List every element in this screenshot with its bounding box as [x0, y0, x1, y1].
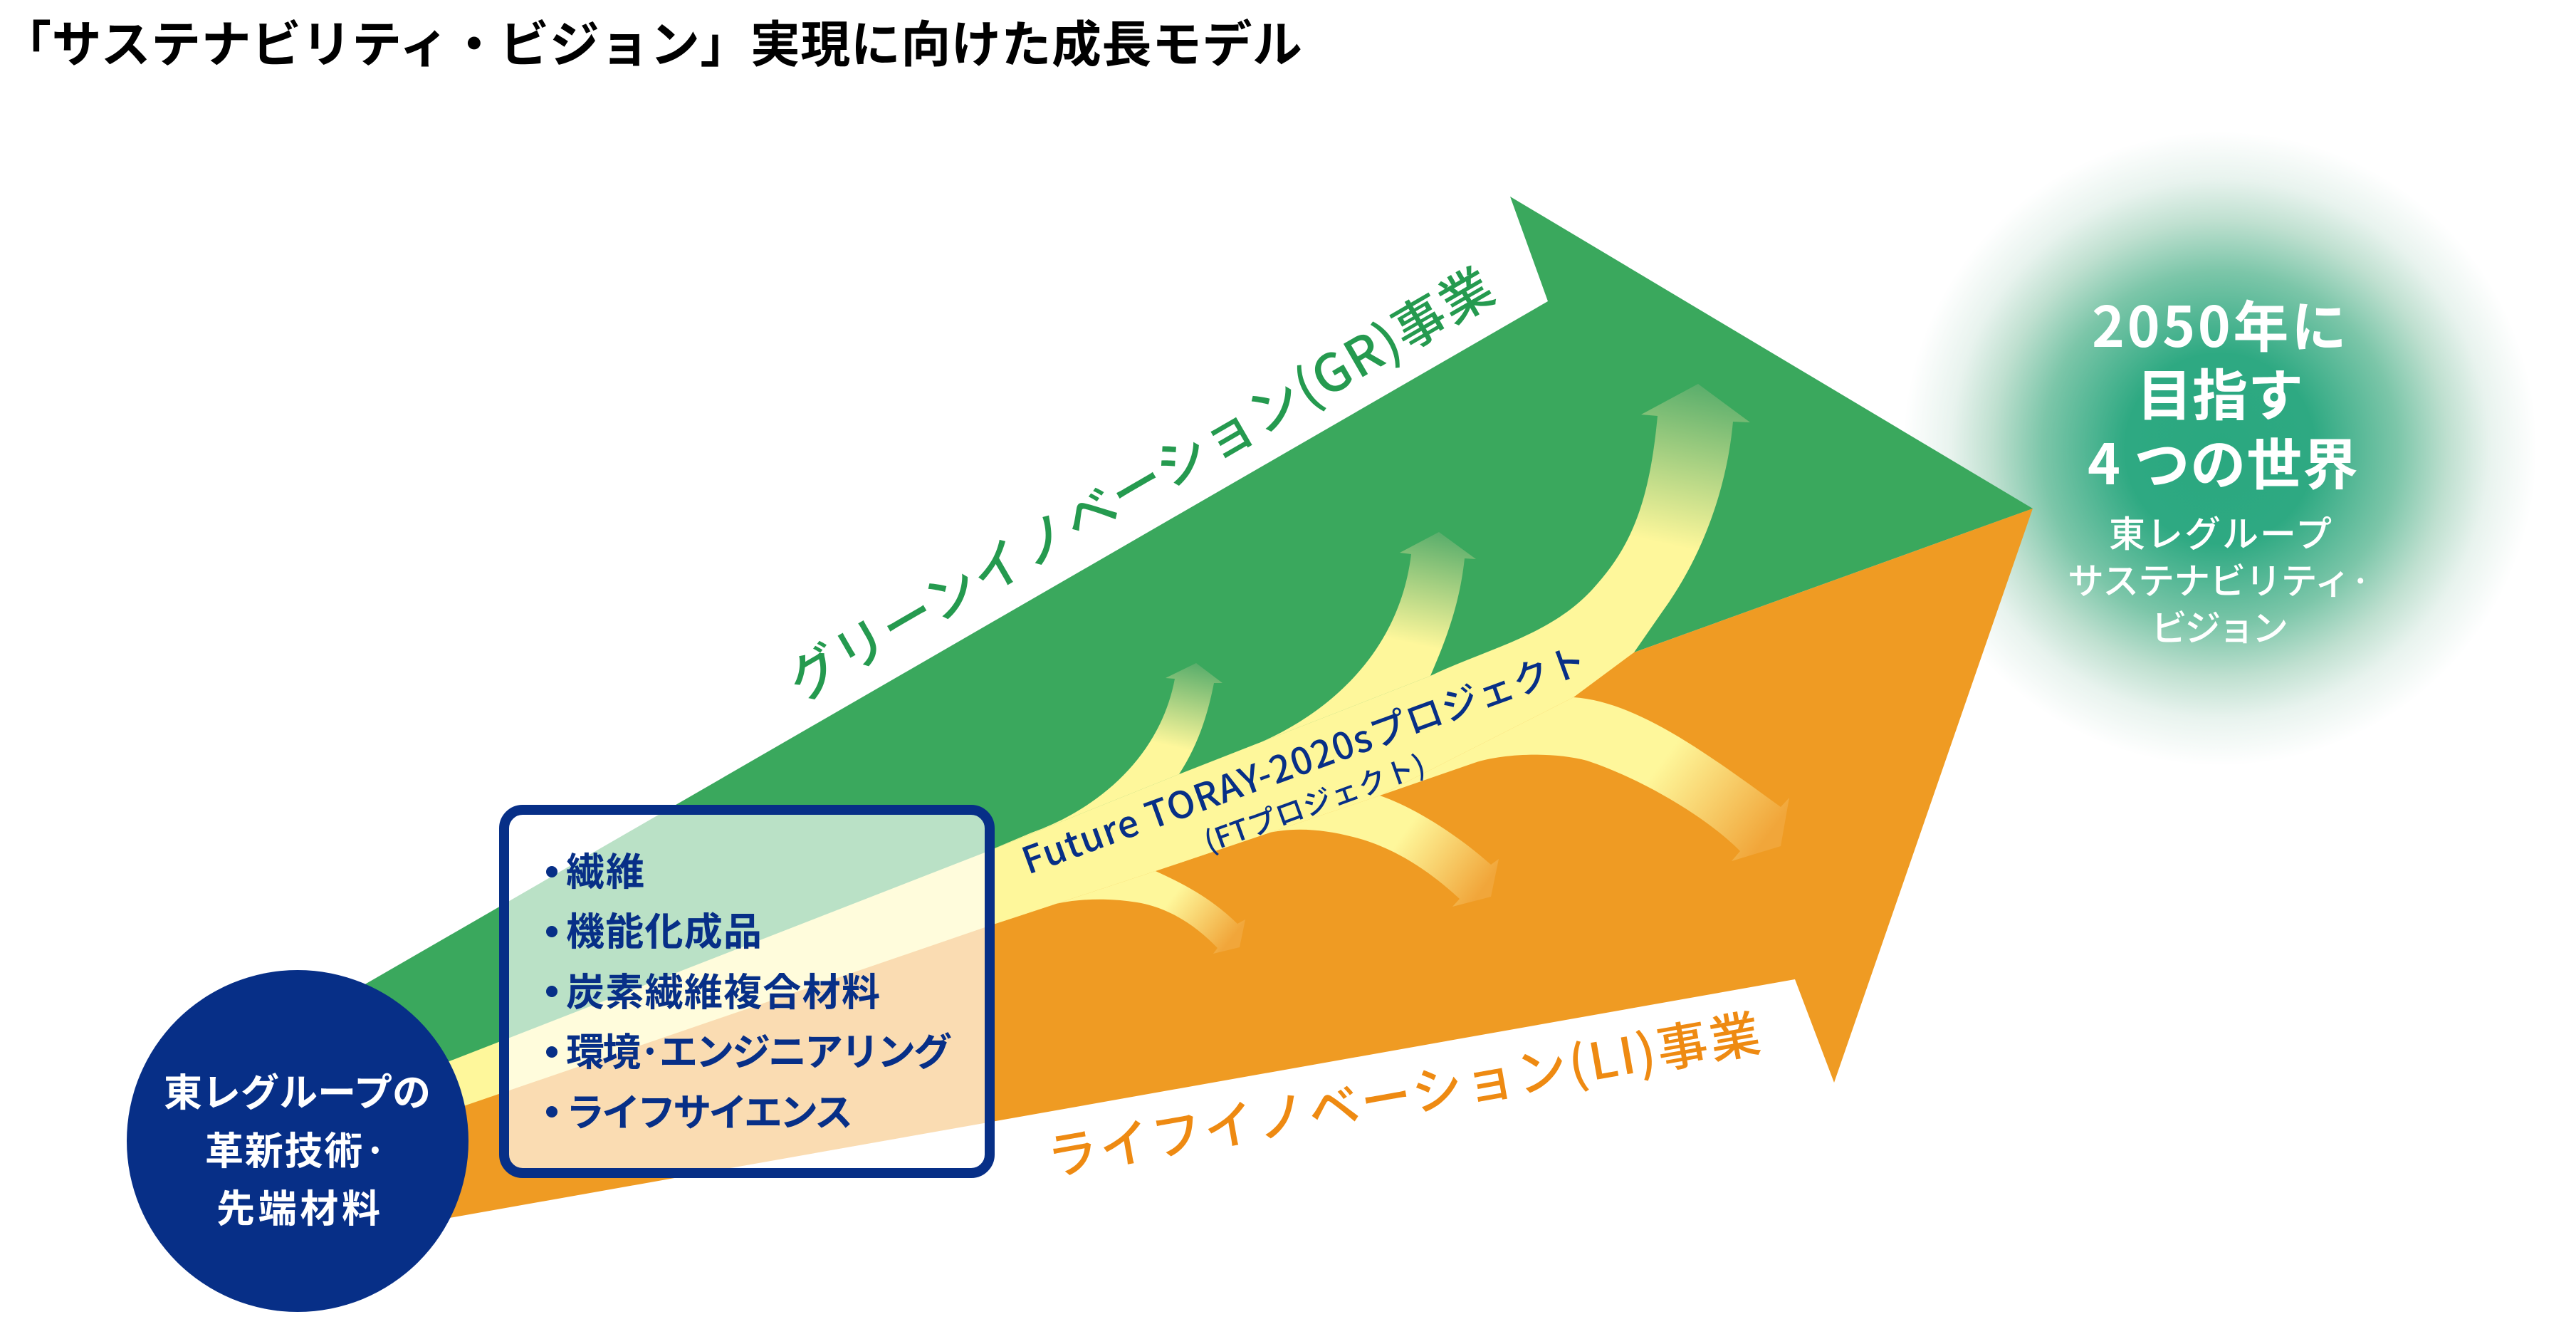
list item: carbon fiber composites: 炭素繊維複合材料	[566, 961, 880, 1017]
label: FT project: (FTプロジェクト)	[1198, 742, 1430, 860]
text: Toray Group Sustainability Vision: サステナビリティ·	[2068, 552, 2371, 605]
circle text: 先端材料	[216, 1177, 380, 1234]
circle text: 革新技術·	[205, 1120, 387, 1176]
arrow: orange innovation	[285, 509, 2033, 1247]
text: 2050 four worlds: 2050年に	[2092, 283, 2347, 363]
text: 2050 four worlds	[2088, 283, 2358, 501]
list item: fibers: 繊維	[566, 840, 644, 897]
text: Toray Group Sustainability Vision: 東レグループ	[2109, 505, 2332, 558]
text: Toray Group Sustainability Vision: ビジョン	[2151, 599, 2288, 652]
branch arrow: large up	[1430, 384, 1750, 697]
circle: Toray core technologies	[127, 970, 468, 1312]
circle text: 東レグループの	[164, 1061, 431, 1117]
list item: environment and engineering: 環境·エンジニアリング	[566, 1021, 952, 1077]
text: Toray Group Sustainability Vision	[2068, 505, 2371, 652]
trunk: Future TORAY project flow	[285, 384, 1789, 1167]
branch arrow: middle down	[1156, 796, 1499, 907]
branch arrow: small up	[985, 663, 1222, 853]
text: 2050 four worlds: 目指す	[2137, 352, 2303, 432]
glow: 2050 vision	[1903, 132, 2537, 766]
label: life innovation business: ライフイノベーション(LI)事業	[1041, 994, 1765, 1191]
arrow: green innovation	[285, 197, 2033, 1154]
label: green innovation business: グリーンイノベーション(GR)事業	[772, 247, 1506, 716]
title: 「サステナビリティ・ビジョン」実現に向けた成長モデル	[1, 5, 1302, 77]
panel: technology fields list	[504, 810, 990, 1173]
list item: life science: ライフサイエンス	[566, 1081, 853, 1137]
text: 2050 four worlds: 4 つの世界	[2088, 421, 2358, 501]
branch arrow: small down	[993, 871, 1245, 954]
label: Future TORAY-2020s project: Future TORAY-2020sプロジェクト	[1013, 630, 1593, 885]
branch arrow: large down	[1380, 697, 1789, 861]
branch arrow: middle up	[1179, 532, 1476, 774]
circle text	[164, 1061, 431, 1234]
list item: functional products: 機能化成品	[566, 900, 762, 957]
